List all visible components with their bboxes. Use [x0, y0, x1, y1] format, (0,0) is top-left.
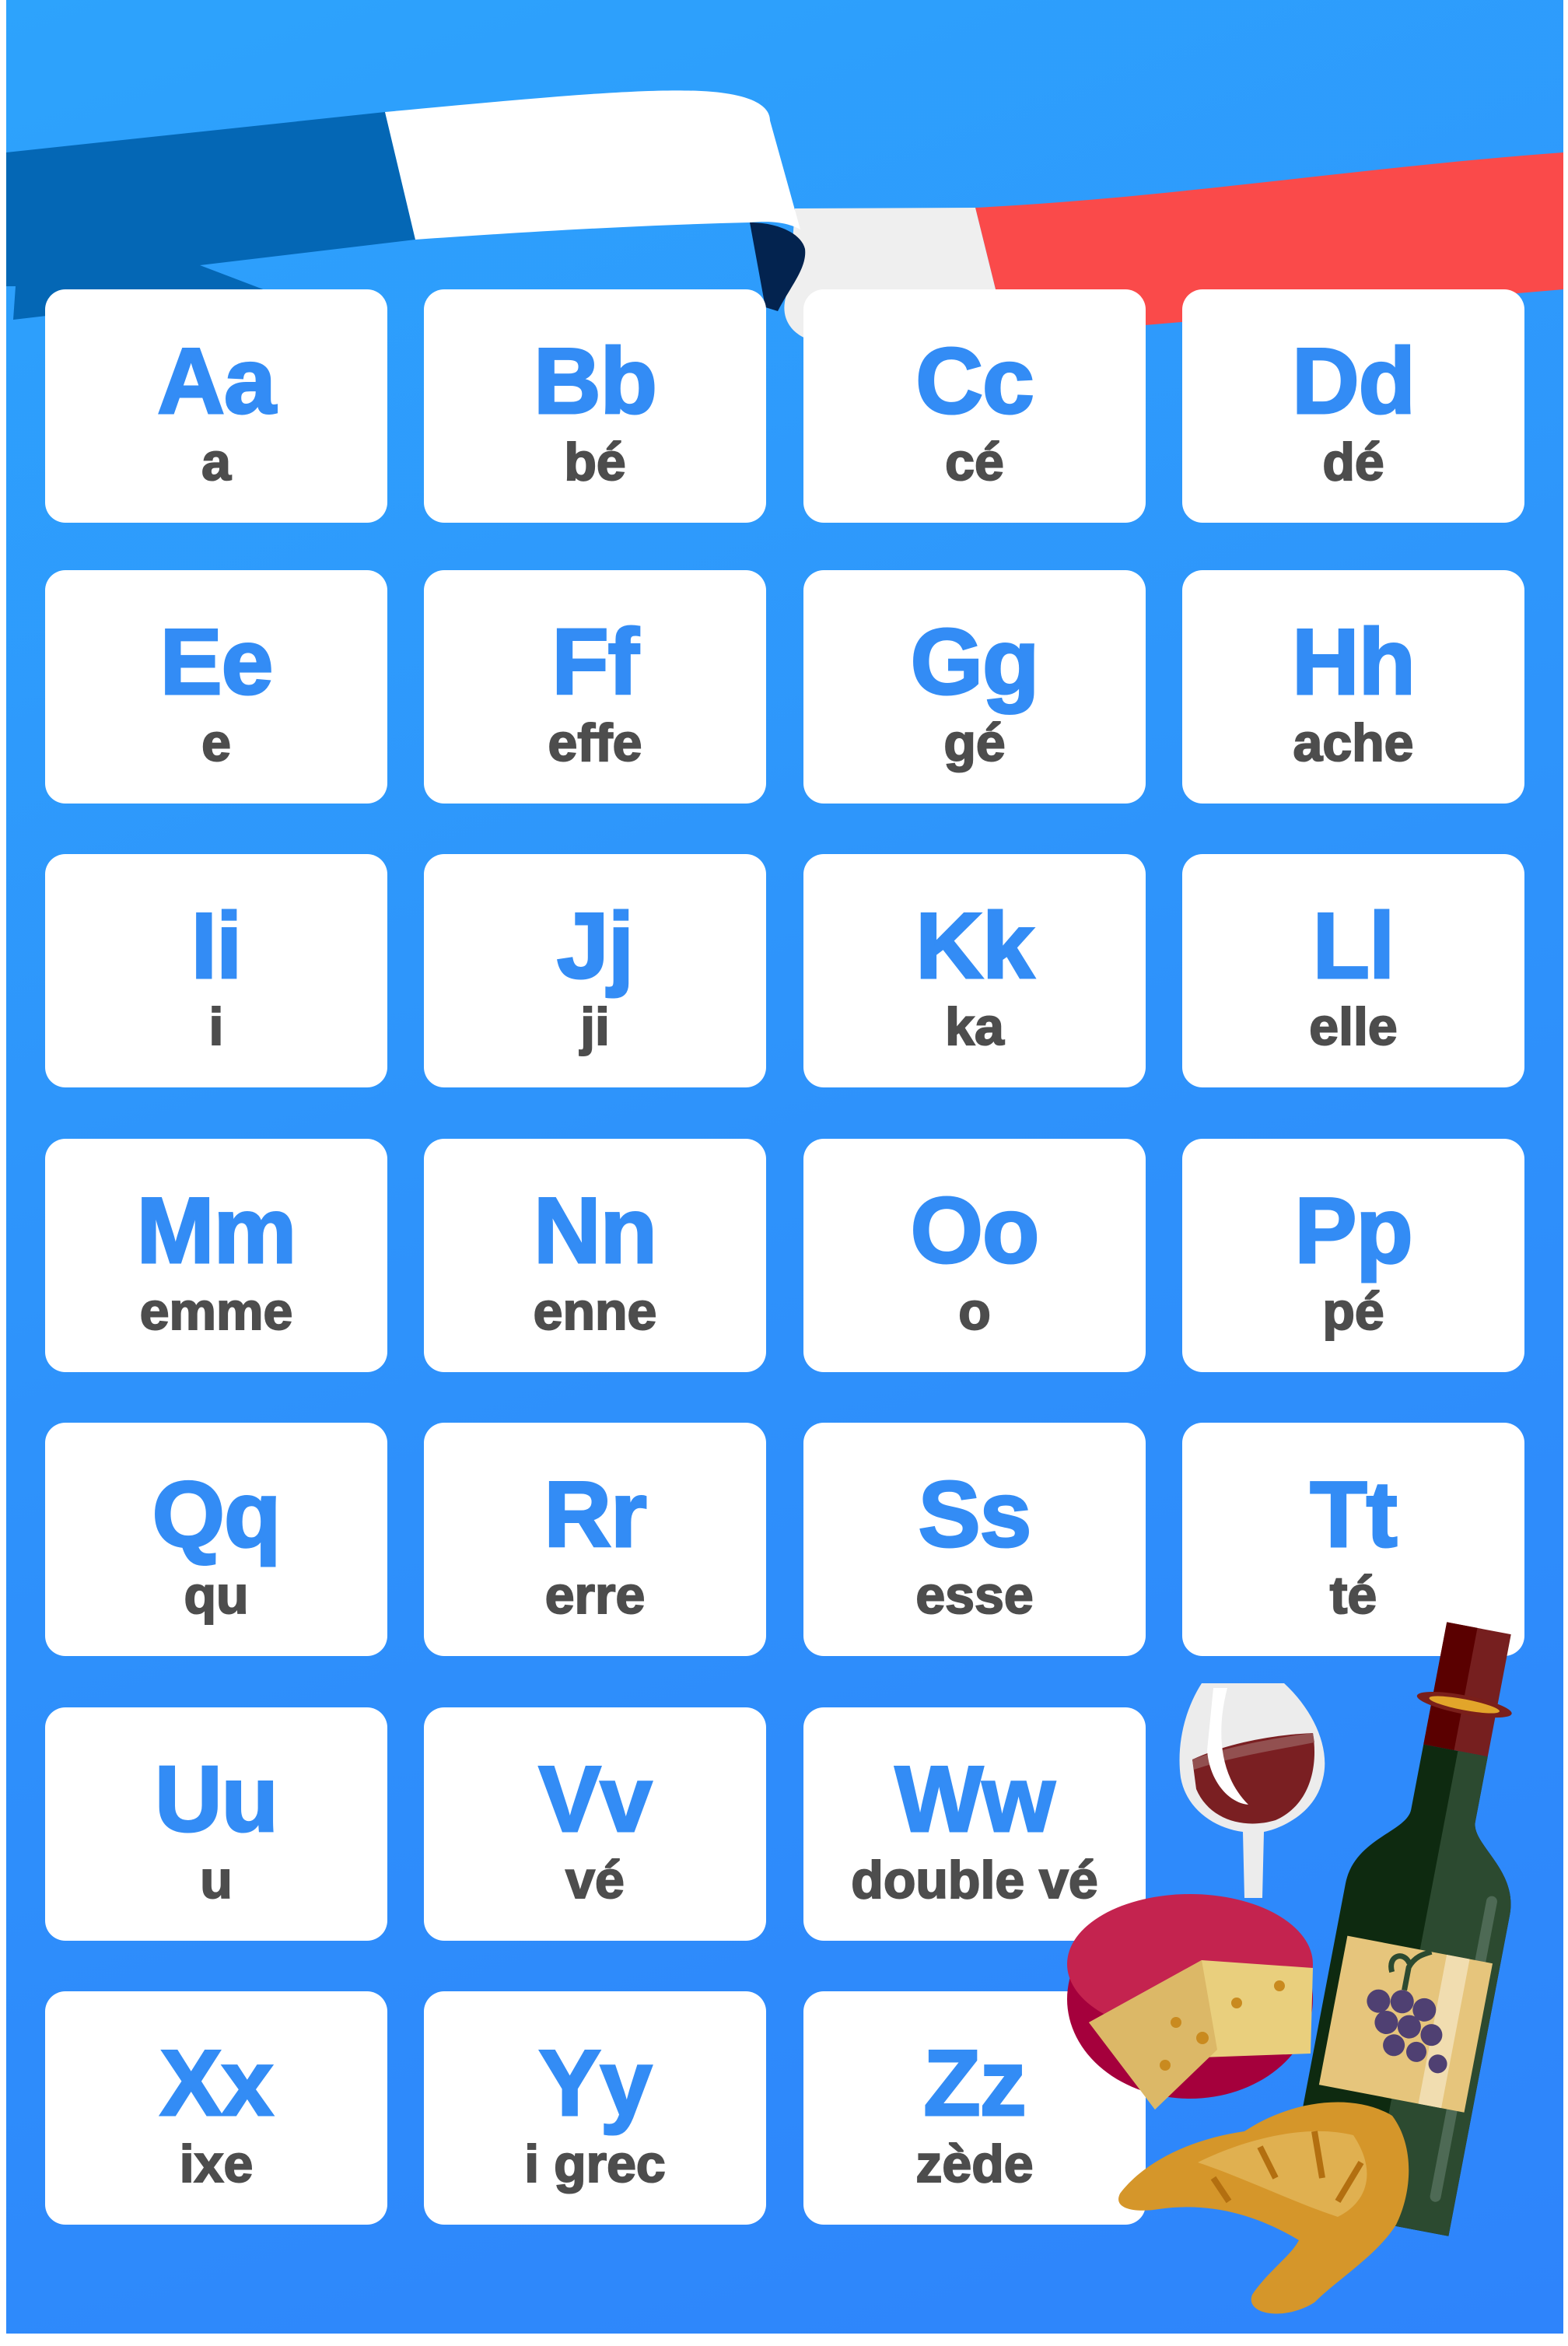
card A: Aa [157, 329, 275, 433]
card F: Ff [551, 610, 639, 714]
card I: i [209, 997, 223, 1056]
card L: elle [1309, 997, 1398, 1056]
card H [1182, 570, 1524, 804]
card G: gé [943, 713, 1006, 772]
card L [1182, 854, 1524, 1087]
flag ribbon [6, 90, 1563, 338]
card B [424, 289, 766, 523]
card Z [803, 1991, 1146, 2225]
card S [803, 1423, 1146, 1656]
flag: white stripe [385, 90, 800, 240]
card T [1182, 1423, 1524, 1656]
card P: Pp [1294, 1178, 1412, 1283]
card X [45, 1991, 387, 2225]
card K [803, 854, 1146, 1087]
card W [803, 1707, 1146, 1941]
card R: erre [545, 1566, 645, 1625]
card Z: zède [915, 2134, 1034, 2194]
card D: Dd [1292, 329, 1415, 433]
card C: cé [945, 432, 1004, 492]
card U: u [200, 1851, 233, 1910]
card Q [45, 1423, 387, 1656]
card F: effe [548, 713, 642, 772]
card E [45, 570, 387, 804]
card V [424, 1707, 766, 1941]
flag: grey stripe [784, 208, 997, 342]
card X: Xx [160, 2031, 272, 2135]
icon: wine glass [1180, 1683, 1325, 1898]
card M: emme [140, 1282, 292, 1341]
card K: ka [945, 997, 1004, 1056]
card E: e [201, 713, 231, 772]
card M [45, 1139, 387, 1372]
card J: Jj [557, 894, 633, 998]
card G [803, 570, 1146, 804]
card E: Ee [160, 610, 272, 714]
card U [45, 1707, 387, 1941]
card F [424, 570, 766, 804]
flag: navy fold [750, 222, 805, 311]
card N [424, 1139, 766, 1372]
card O: o [958, 1282, 991, 1341]
card L: Ll [1313, 894, 1394, 998]
card Z: Zz [923, 2031, 1026, 2135]
card H: ache [1293, 713, 1414, 772]
flag: blue stripe [6, 112, 415, 320]
card H: Hh [1292, 610, 1415, 714]
card U: Uu [155, 1747, 278, 1851]
card S: esse [915, 1566, 1034, 1625]
card Y: i grec [524, 2134, 666, 2194]
card N: enne [534, 1282, 656, 1341]
card B: Bb [534, 329, 656, 433]
card J [424, 854, 766, 1087]
flag: red stripe [975, 152, 1563, 325]
card X: ixe [180, 2134, 253, 2194]
card I [45, 854, 387, 1087]
card C: Cc [915, 329, 1034, 433]
card D: dé [1322, 432, 1384, 492]
card Q: qu [184, 1566, 249, 1625]
card A: a [201, 432, 231, 492]
card P [1182, 1139, 1524, 1372]
card B: bé [564, 432, 626, 492]
card O [803, 1139, 1146, 1372]
card grid [45, 289, 1524, 2225]
card R [424, 1423, 766, 1656]
card O: Oo [911, 1178, 1038, 1283]
icon: cheese wheel [1067, 1894, 1313, 2110]
card T: té [1330, 1566, 1377, 1625]
card G: Gg [911, 610, 1038, 714]
card J: ji [580, 997, 610, 1056]
card V: vé [565, 1851, 625, 1910]
icon: croissant [1118, 2103, 1409, 2313]
card V: Vv [539, 1747, 651, 1851]
card W: Ww [895, 1747, 1054, 1851]
card N: Nn [534, 1178, 656, 1283]
card W: double vé [851, 1851, 1098, 1910]
card S: Ss [919, 1462, 1031, 1567]
card A [45, 289, 387, 523]
card P: pé [1322, 1282, 1384, 1341]
card C [803, 289, 1146, 523]
card Y: Yy [539, 2031, 651, 2135]
card Q: Qq [152, 1462, 280, 1567]
card M: Mm [137, 1178, 296, 1283]
card D [1182, 289, 1524, 523]
card K: Kk [915, 894, 1034, 998]
card T: Tt [1310, 1462, 1397, 1567]
card R: Rr [544, 1462, 646, 1567]
card Y [424, 1991, 766, 2225]
icon: wine bottle [1284, 1612, 1562, 2236]
card I: Ii [191, 894, 241, 998]
